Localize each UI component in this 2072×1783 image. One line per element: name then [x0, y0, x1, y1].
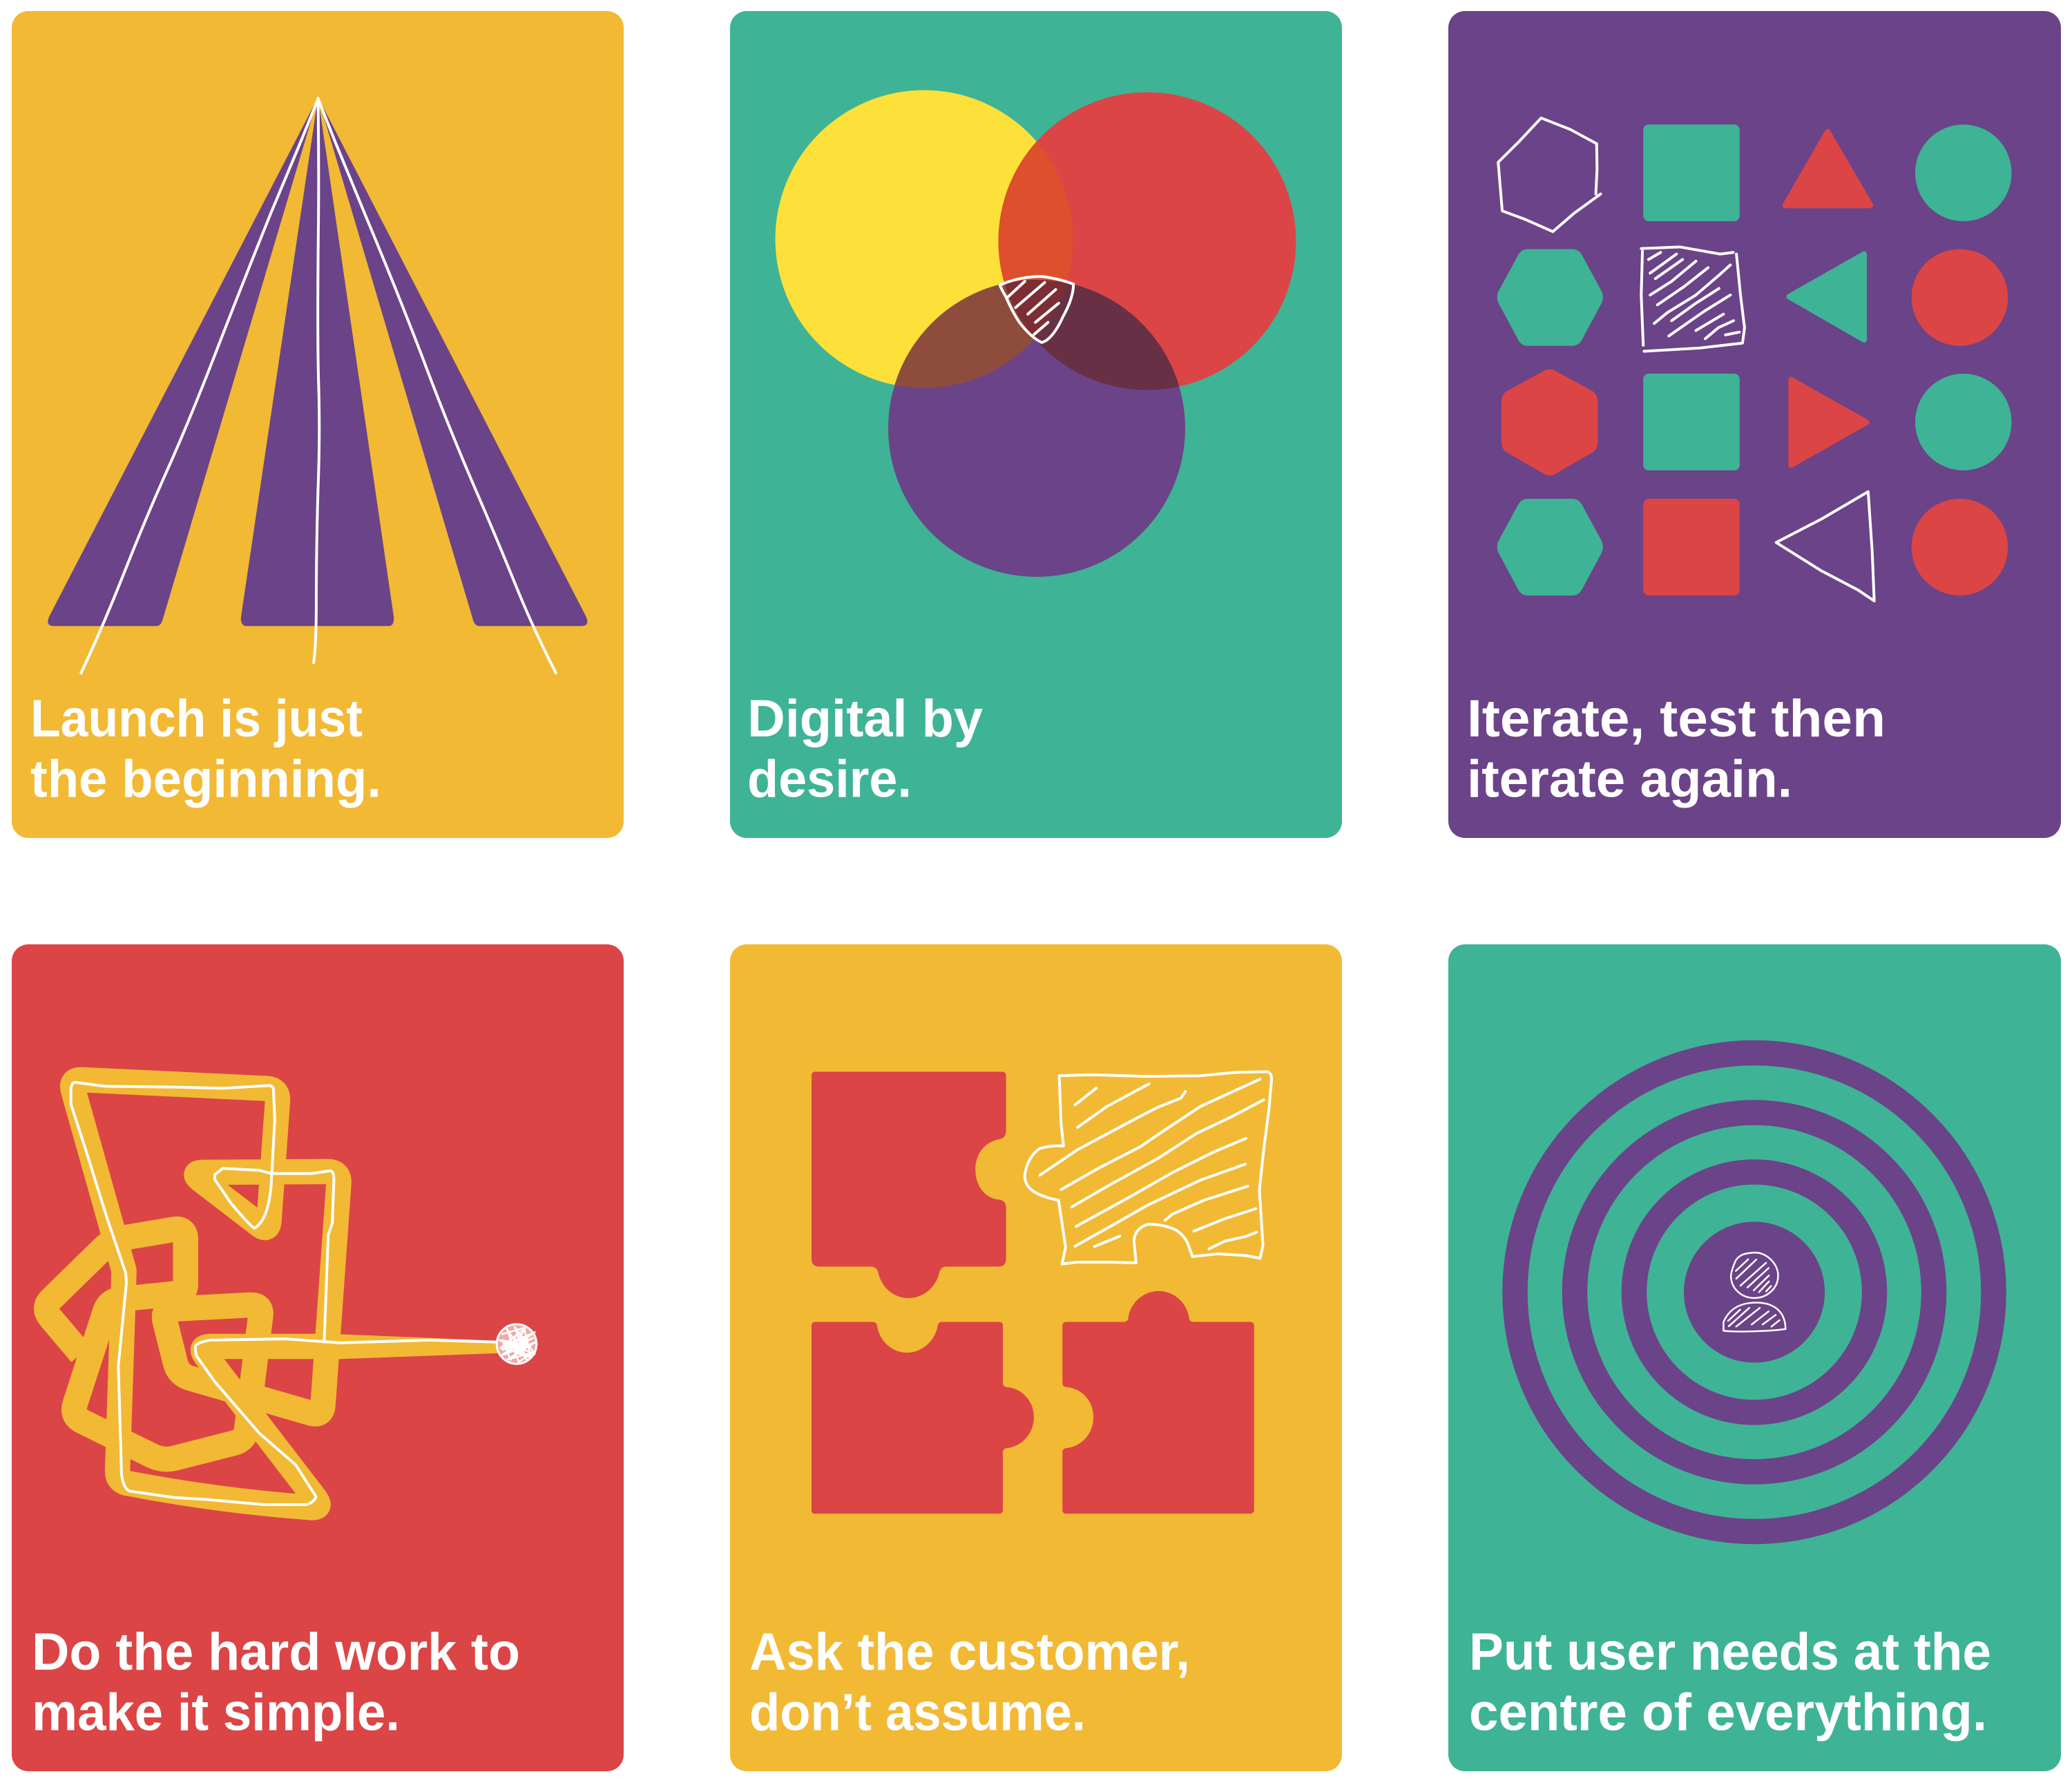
heading: don’t assume.	[749, 1683, 1086, 1742]
heading: Ask the customer,	[749, 1623, 1190, 1681]
illustration: three-circle venn diagram	[775, 90, 1296, 577]
panel: do the hard work to make it simple	[12, 944, 624, 1771]
puzzle piece: bottom right	[1062, 1291, 1254, 1514]
panel background: yellow card	[12, 11, 624, 838]
heading: Put user needs at the	[1469, 1623, 1991, 1681]
puzzle piece: top left	[812, 1071, 1006, 1298]
heading: Digital by	[747, 689, 983, 748]
panel: put user needs at the centre of everything	[1448, 944, 2061, 1771]
illustration: converging purple wedges	[48, 97, 587, 673]
panel background: red card	[12, 944, 624, 1771]
icon: sketched person	[1723, 1252, 1785, 1331]
panel background: green card	[730, 11, 1342, 838]
heading: centre of everything.	[1469, 1683, 1987, 1742]
sketch: hexagon outline	[1498, 118, 1601, 231]
panel: ask the customer, don't assume	[730, 944, 1342, 1771]
panel: iterate, test then iterate again	[1448, 11, 2061, 838]
heading: Iterate, test then	[1467, 689, 1886, 748]
illustration: tangled path simplifying to a line	[46, 1080, 537, 1507]
illustration: concentric target rings	[1515, 1053, 1993, 1532]
puzzle piece: bottom left	[812, 1322, 1034, 1514]
sketch: missing puzzle piece	[1025, 1071, 1272, 1264]
icon: scribbled ball	[497, 1324, 537, 1364]
sketch: hatched square	[1641, 247, 1745, 351]
heading: make it simple.	[32, 1683, 400, 1742]
panel background: yellow card	[730, 944, 1342, 1771]
panel: digital by desire	[730, 11, 1342, 838]
panel background: purple card	[1448, 11, 2061, 838]
panel: launch is just the beginning	[12, 11, 624, 838]
heading: Launch is just	[30, 689, 363, 748]
heading: the beginning.	[30, 750, 381, 808]
illustration: grid of shapes	[1497, 118, 2012, 601]
sketch: triangle outline	[1776, 492, 1874, 601]
heading: iterate again.	[1467, 750, 1792, 808]
sketch: hatched centre overlap	[1000, 276, 1073, 343]
heading: desire.	[747, 750, 912, 808]
panel background: green card	[1448, 944, 2061, 1771]
heading: Do the hard work to	[32, 1623, 520, 1681]
illustration: jigsaw pieces	[812, 1071, 1272, 1514]
